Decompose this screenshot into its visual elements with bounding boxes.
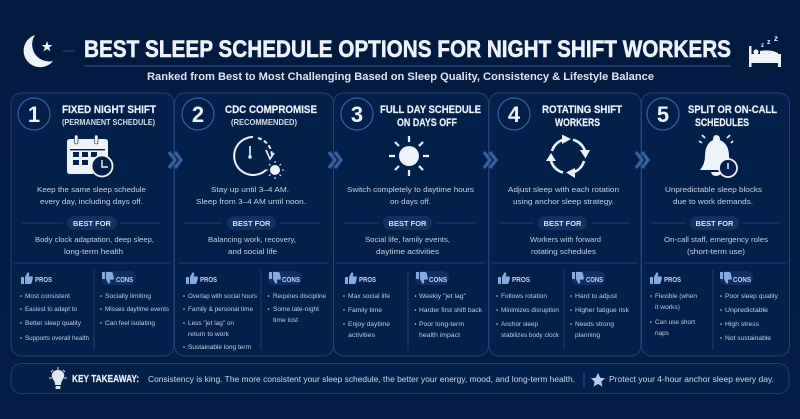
pros list	[496, 272, 560, 339]
pros list	[20, 272, 89, 342]
pros list: Family time	[348, 307, 382, 314]
pros list: Anchor sleep	[501, 321, 538, 328]
cons list: Misses daytime events	[105, 306, 170, 313]
cons list: Needs strong	[575, 321, 614, 328]
panel heading: WORKERS	[555, 117, 600, 129]
pros list	[183, 272, 258, 351]
best for text: Social life, family events,	[365, 235, 450, 244]
cons list: CONS	[116, 275, 133, 284]
best for label	[22, 216, 160, 230]
pros list: PROS	[512, 275, 530, 284]
cons list: Weekly "jet lag"	[419, 293, 467, 300]
description: Stay up until 3–4 AM.	[211, 185, 289, 194]
cons list	[100, 271, 170, 327]
description: on days off.	[390, 197, 431, 206]
pros list: Sustainable long term	[188, 344, 251, 351]
description: Keep the same sleep schedule	[37, 185, 146, 194]
icon: bed with zzz	[749, 34, 781, 67]
key takeaway bar	[11, 364, 789, 394]
description	[508, 185, 619, 206]
icon: rotating arrows	[546, 134, 590, 178]
cons list	[720, 271, 779, 342]
panel: 3 full day schedule	[334, 93, 488, 356]
arrow: panel 3 to 4	[484, 152, 496, 168]
cons list: Socially limiting	[105, 293, 151, 300]
panel heading: ON DAYS OFF	[397, 117, 457, 129]
anchor sleep reminder: Protect your 4-hour anchor sleep every day.	[609, 374, 774, 384]
best for text: and social life	[228, 247, 277, 256]
best for label: BEST FOR	[389, 219, 427, 228]
takeaway sentence: Consistency is king. The more consistent your sleep schedule, the better your energy, mood, and long-term health.	[148, 374, 575, 384]
pros list: Can use short	[655, 319, 695, 326]
description: Switch completely to daytime hours	[347, 185, 474, 194]
best for text	[365, 235, 450, 256]
panel heading	[688, 104, 777, 129]
cons list	[415, 271, 483, 339]
panel: 1 fixed night shift	[11, 93, 174, 356]
cons list: CONS	[733, 275, 751, 284]
best for text: (short-term use)	[687, 247, 746, 256]
arrow: panel 2 to 3	[329, 152, 341, 168]
best for text: Body clock adaptation, deep sleep,	[35, 235, 154, 244]
best for text: rotating schedules	[531, 247, 596, 256]
best for label: BEST FOR	[696, 219, 734, 228]
panel: 5 split or on-call	[642, 93, 790, 356]
pros list: Overlap with social hours	[188, 293, 258, 300]
best for text	[530, 235, 601, 256]
arrow: panel 4 to 5	[636, 152, 648, 168]
header	[24, 34, 781, 83]
cons list: Requires discipline	[273, 293, 326, 300]
rank number 5: 5	[657, 102, 669, 127]
description	[665, 185, 762, 206]
panel heading: SPLIT OR ON-CALL	[688, 104, 777, 116]
icon: clock with sun	[234, 137, 284, 179]
subtitle: Ranked from Best to Most Challenging Based on Sleep Quality, Consistency & Lifestyle Balance	[147, 71, 654, 83]
best for text: Workers with forward	[530, 235, 601, 244]
pros list	[650, 272, 697, 337]
description: Sleep from 3–4 AM until noon.	[196, 197, 306, 206]
cons list: time lost	[273, 317, 298, 324]
rank number 1	[18, 98, 50, 130]
cons list: Poor long-term	[419, 321, 464, 328]
icon: star	[591, 373, 605, 386]
pros list: Family & personal time	[188, 306, 253, 313]
best for text: long-term health	[64, 247, 123, 256]
pros list: PROS	[200, 275, 217, 284]
pros list: Follows rotation	[501, 293, 547, 300]
best for label: BEST FOR	[73, 219, 112, 228]
panel heading: SCHEDULES	[695, 117, 749, 129]
icon: moon and star	[24, 35, 53, 67]
cons list	[570, 271, 630, 339]
cons list: CONS	[586, 275, 603, 284]
icon: bed with zzz: z	[774, 34, 778, 43]
pros list	[343, 272, 390, 339]
description	[196, 185, 306, 206]
pros list: activities	[348, 332, 376, 339]
cons list: Can feel isolating	[105, 320, 155, 327]
icon: bell with clock	[699, 135, 737, 177]
description: Unpredictable sleep blocks	[665, 185, 762, 194]
rank number 1: 1	[28, 102, 40, 127]
cons list: health impact	[419, 332, 460, 339]
key takeaway label: KEY TAKEAWAY:	[72, 374, 139, 385]
cons list: Poor sleep quality	[725, 293, 779, 300]
icon: bed with zzz: z	[761, 43, 764, 49]
best for text: Balancing work, recovery,	[208, 235, 296, 244]
icon: sun	[389, 136, 429, 176]
panel heading: (RECOMMENDED)	[231, 117, 297, 127]
best for label: BEST FOR	[233, 219, 271, 228]
pros list: stabilizes body clock	[501, 332, 560, 339]
cons list: Unpredictable	[725, 307, 768, 314]
best for label	[651, 216, 780, 230]
cons list: Not sustainable	[725, 335, 771, 342]
pros list: Supports overall health	[25, 335, 89, 342]
best for text	[35, 235, 154, 256]
panel: 2 cdc compromise	[174, 93, 334, 356]
description: Adjust sleep with each rotation	[508, 185, 619, 194]
panel heading	[225, 104, 317, 127]
panel heading: FIXED NIGHT SHIFT	[62, 104, 156, 116]
best for label: BEST FOR	[544, 219, 582, 228]
panel heading: ROTATING SHIFT	[542, 104, 622, 116]
cons list: planning	[575, 332, 600, 339]
description: due to work demands.	[673, 197, 753, 206]
rank number 2	[182, 98, 214, 130]
cons list: Some late-night	[273, 306, 319, 313]
pros list: Enjoy daytime	[348, 321, 390, 328]
pros list: Better sleep quality	[25, 320, 82, 327]
pros list: Minimizes disruption	[501, 307, 559, 314]
best for text	[208, 235, 296, 256]
cons list: Hard to adjust	[575, 293, 617, 300]
best for text: On-call staff, emergency roles	[664, 235, 768, 244]
cons list: CONS	[282, 275, 300, 284]
panel heading: CDC COMPROMISE	[225, 104, 317, 116]
pros list: it works)	[655, 304, 680, 311]
icon: bed with zzz: z	[767, 39, 771, 46]
pros list: Max social life	[348, 293, 390, 300]
rank number 2: 2	[192, 102, 204, 127]
icon: calendar with clock	[67, 135, 112, 176]
rank number 4: 4	[508, 102, 521, 127]
best for text	[664, 235, 768, 256]
pros list: PROS	[35, 275, 52, 284]
rank number 3	[341, 98, 373, 130]
cons list: Higher fatigue risk	[575, 307, 630, 314]
cons list	[268, 271, 326, 324]
panel heading: (PERMANENT SCHEDULE)	[62, 117, 155, 127]
pros list: PROS	[664, 275, 681, 284]
cons list: Harder first shift back	[419, 307, 483, 314]
best for text: daytime activities	[376, 247, 439, 256]
rank number 3: 3	[351, 102, 363, 127]
pros list: Most consistent	[25, 293, 70, 300]
best for label	[184, 216, 320, 230]
rank number 5	[647, 98, 679, 130]
rank number 4	[498, 98, 530, 130]
panel heading	[380, 104, 481, 129]
cons list: High stress	[725, 321, 760, 328]
panel heading	[62, 104, 156, 127]
icon: light bulb	[49, 367, 67, 389]
best for label	[499, 216, 630, 230]
arrow: panel 1 to 2	[169, 152, 181, 168]
description: using anchor sleep strategy.	[513, 197, 614, 206]
pros list: return to work	[188, 331, 230, 338]
description	[37, 185, 146, 206]
panel heading	[542, 104, 622, 129]
pros list: Less "jet lag" on	[188, 320, 234, 327]
pros list: PROS	[359, 275, 376, 284]
best for label	[344, 216, 476, 230]
panel heading: FULL DAY SCHEDULE	[380, 104, 481, 116]
pros list: Easiest to adapt to	[25, 306, 77, 313]
pros list: Flexible (when	[655, 293, 697, 300]
cons list: CONS	[429, 275, 447, 284]
description: every day, including days off.	[40, 197, 143, 206]
description	[347, 185, 474, 206]
panel: 4 rotating shift workers	[489, 93, 641, 356]
pros list: naps	[655, 330, 670, 337]
